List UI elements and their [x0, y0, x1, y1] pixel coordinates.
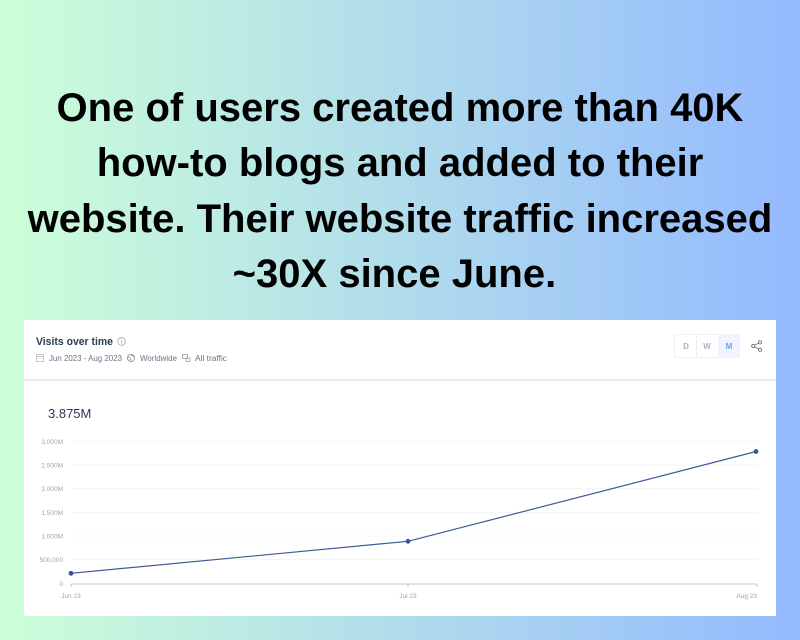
x axis labels [61, 593, 757, 600]
icon: calendar [36, 354, 44, 362]
x axis [71, 584, 757, 587]
y axis labels: 1.000M [41, 534, 63, 540]
title: One of users created more than 40K [57, 86, 743, 130]
data points [69, 449, 758, 576]
granularity toggle: D [683, 342, 689, 351]
icon: globe [127, 354, 135, 362]
title: how-to blogs and added to their [97, 141, 703, 185]
region: Worldwide [140, 354, 177, 363]
icon: traffic [182, 354, 190, 362]
granularity toggle [674, 334, 740, 358]
y axis labels: 500,000 [40, 557, 63, 564]
title: website. Their website traffic increased [28, 197, 772, 241]
y axis labels: 3.000M [41, 439, 63, 446]
title: ~30X since June. [233, 252, 556, 296]
y axis labels: 2.500M [41, 462, 63, 470]
panel heading: Visits over time [36, 336, 113, 348]
panel: visits over time chart [24, 320, 776, 616]
granularity toggle: W [703, 342, 711, 351]
x axis labels: Jun 23 [61, 593, 81, 600]
gridlines [71, 442, 757, 560]
icon: info [118, 338, 125, 345]
y axis labels: 2.000M [41, 486, 63, 493]
total visits: 3.875M [48, 406, 91, 421]
date range: Jun 2023 - Aug 2023 [49, 354, 122, 363]
line chart [40, 439, 758, 600]
x axis labels: Jul 23 [399, 593, 417, 600]
x axis labels: Aug 23 [736, 593, 757, 600]
icon: share [752, 341, 762, 351]
y axis labels: 0 [59, 581, 63, 588]
traffic type: All traffic [195, 354, 227, 363]
title [28, 86, 772, 296]
y axis labels: 1.500M [41, 510, 63, 517]
granularity toggle: M [726, 342, 733, 351]
y axis labels [40, 439, 63, 588]
data line [71, 452, 756, 573]
